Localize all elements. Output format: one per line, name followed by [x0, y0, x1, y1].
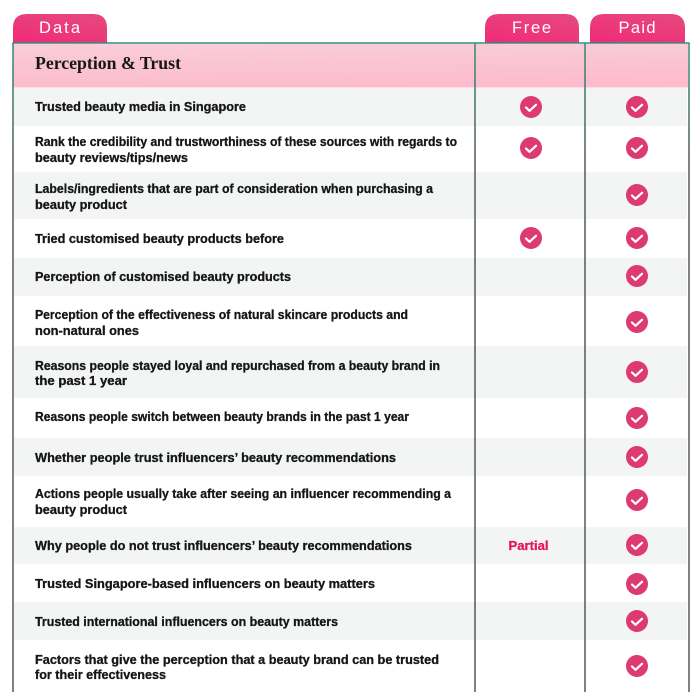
row: Reasons people stayed loyal: Reasons people stayed loyal and repurchased from a beauty brand in — [35, 359, 440, 373]
row: Perception of the effectiveness — [35, 308, 648, 338]
row: Reasons people stayed loyal: the past 1 year — [35, 374, 127, 388]
row: Tried customised beauty products before: Tried customised beauty products before — [35, 232, 284, 246]
tab: Data: Data — [39, 19, 81, 37]
row: Factors that give the perception — [35, 653, 648, 682]
row: Labels/ingredients: beauty product — [35, 198, 128, 212]
row: Perception of the effectiveness: non-natural ones — [35, 324, 139, 338]
row: Reasons people switch: Reasons people switch between beauty brands in the past 1 year — [35, 410, 409, 424]
row: Trusted Singapore-based influencers — [35, 573, 648, 595]
tab: Paid — [590, 14, 685, 43]
tab: Paid: Paid — [618, 19, 656, 37]
row: Rank the credibility: beauty reviews/tips/news — [35, 151, 188, 165]
row: Whether people trust influencers: Whether people trust influencers’ beauty recommendations — [35, 451, 396, 465]
tab: Free — [485, 14, 579, 43]
row: Actions people usually take: Actions people usually take after seeing an influencer recommending a — [35, 487, 452, 501]
row: Trusted international influencers — [14, 602, 687, 640]
section header: Perception & Trust: Perception & Trust — [35, 53, 181, 73]
row: Rank the credibility: Rank the credibility and trustworthiness of these sources with regards to — [35, 135, 457, 149]
row: Reasons people stayed loyal — [14, 346, 687, 398]
row: Perception of customised beauty products — [14, 258, 687, 296]
row: Trusted beauty media in Singapore — [14, 88, 687, 126]
row: Why people do not trust influencers: Why people do not trust influencers’ beauty recommendations — [35, 539, 412, 553]
row: Trusted beauty media in Singapore: Trusted beauty media in Singapore — [35, 100, 246, 114]
row: Reasons people switch — [35, 407, 648, 429]
row: Labels/ingredients: Labels/ingredients that are part of consideration when purchasing a — [35, 182, 434, 196]
row: Factors that give the perception: for their effectiveness — [35, 668, 166, 682]
section header: Perception & Trust — [13, 44, 688, 88]
row: Rank the credibility — [35, 135, 648, 165]
row: Why people do not trust influencers — [14, 527, 687, 564]
row: Actions people usually take — [35, 487, 648, 517]
row: Actions people usually take: beauty product — [35, 503, 128, 517]
row: Trusted international influencers: Trusted international influencers on beauty matters — [35, 615, 338, 629]
row: Why people do not trust influencers: Partial — [508, 539, 548, 553]
row: Perception of the effectiveness: Perception of the effectiveness of natural skincare products and — [35, 308, 408, 322]
row: Labels/ingredients — [14, 172, 687, 219]
row: Whether people trust influencers — [14, 438, 687, 476]
row: Factors that give the perception: Factors that give the perception that a beauty brand can be trusted — [35, 653, 439, 667]
row: Trusted Singapore-based influencers: Trusted Singapore-based influencers on beauty matters — [35, 577, 375, 591]
tab: Data — [13, 14, 107, 43]
tab: Free: Free — [512, 19, 551, 37]
row: Perception of customised beauty products: Perception of customised beauty products — [35, 270, 291, 284]
row: Tried customised beauty products before — [35, 227, 648, 249]
